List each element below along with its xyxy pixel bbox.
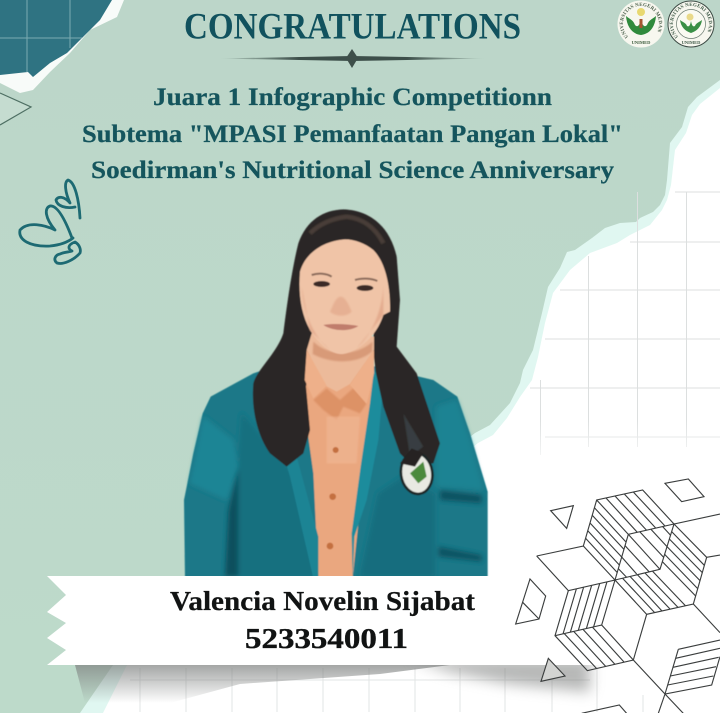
logo: university badge two: UNIVERSITAS NEGERI MEDAN: [670, 2, 712, 39]
lips: [323, 324, 358, 330]
panel: white grid paper area with torn edge: [80, 80, 720, 713]
icon: shaded triangle: [541, 658, 565, 681]
jacket: [184, 357, 488, 578]
shadow below banner: [75, 658, 590, 703]
white strip at bottom edge: [0, 713, 720, 718]
cube outlines: [537, 490, 720, 713]
logo: university badge one: UNIVERSITAS NEGERI MEDAN: [620, 2, 662, 39]
nose: [330, 297, 352, 316]
icon: outlined triangle: [0, 93, 31, 125]
divider with diamond: [218, 49, 487, 68]
logo: university badge one: UNIMED: [632, 40, 651, 45]
line: achievement: Juara 1 Infographic Competitionn: [153, 84, 552, 111]
lapel left: [280, 443, 318, 578]
icon: small rhombus: [665, 479, 704, 502]
face: [300, 239, 390, 354]
logo: university badge one: [618, 0, 664, 48]
partial rhombus: [582, 705, 627, 713]
icon: split triangle: [516, 579, 546, 624]
student number: 5233540011: [245, 624, 408, 655]
icon: hearts doodle: [20, 180, 80, 263]
title: CONGRATULATIONS: [184, 6, 521, 48]
shirt: [305, 350, 374, 578]
text block: competition details: [82, 84, 623, 184]
lapel right: [352, 370, 383, 578]
graphic: isometric line cubes: [516, 479, 720, 713]
badge: [398, 451, 435, 496]
collar: [305, 350, 327, 398]
hair: [253, 209, 440, 467]
line: subtheme: Subtema "MPASI Pemanfaatan Pangan Lokal": [82, 121, 623, 148]
line: event: Soedirman's Nutritional Science Anniversary: [91, 157, 615, 184]
neck: [307, 333, 374, 392]
eyes: [312, 274, 377, 291]
photo: student portrait: [184, 209, 488, 578]
panel: teal torn corner: [0, 0, 124, 93]
logo: university badge two: UNIMED: [682, 40, 701, 45]
logo: university badge two: [668, 0, 714, 48]
banner: name ribbon: [47, 576, 720, 665]
hatching: [563, 492, 720, 685]
icon: small triangle: [551, 506, 573, 528]
student name: Valencia Novelin Sijabat: [170, 586, 475, 616]
